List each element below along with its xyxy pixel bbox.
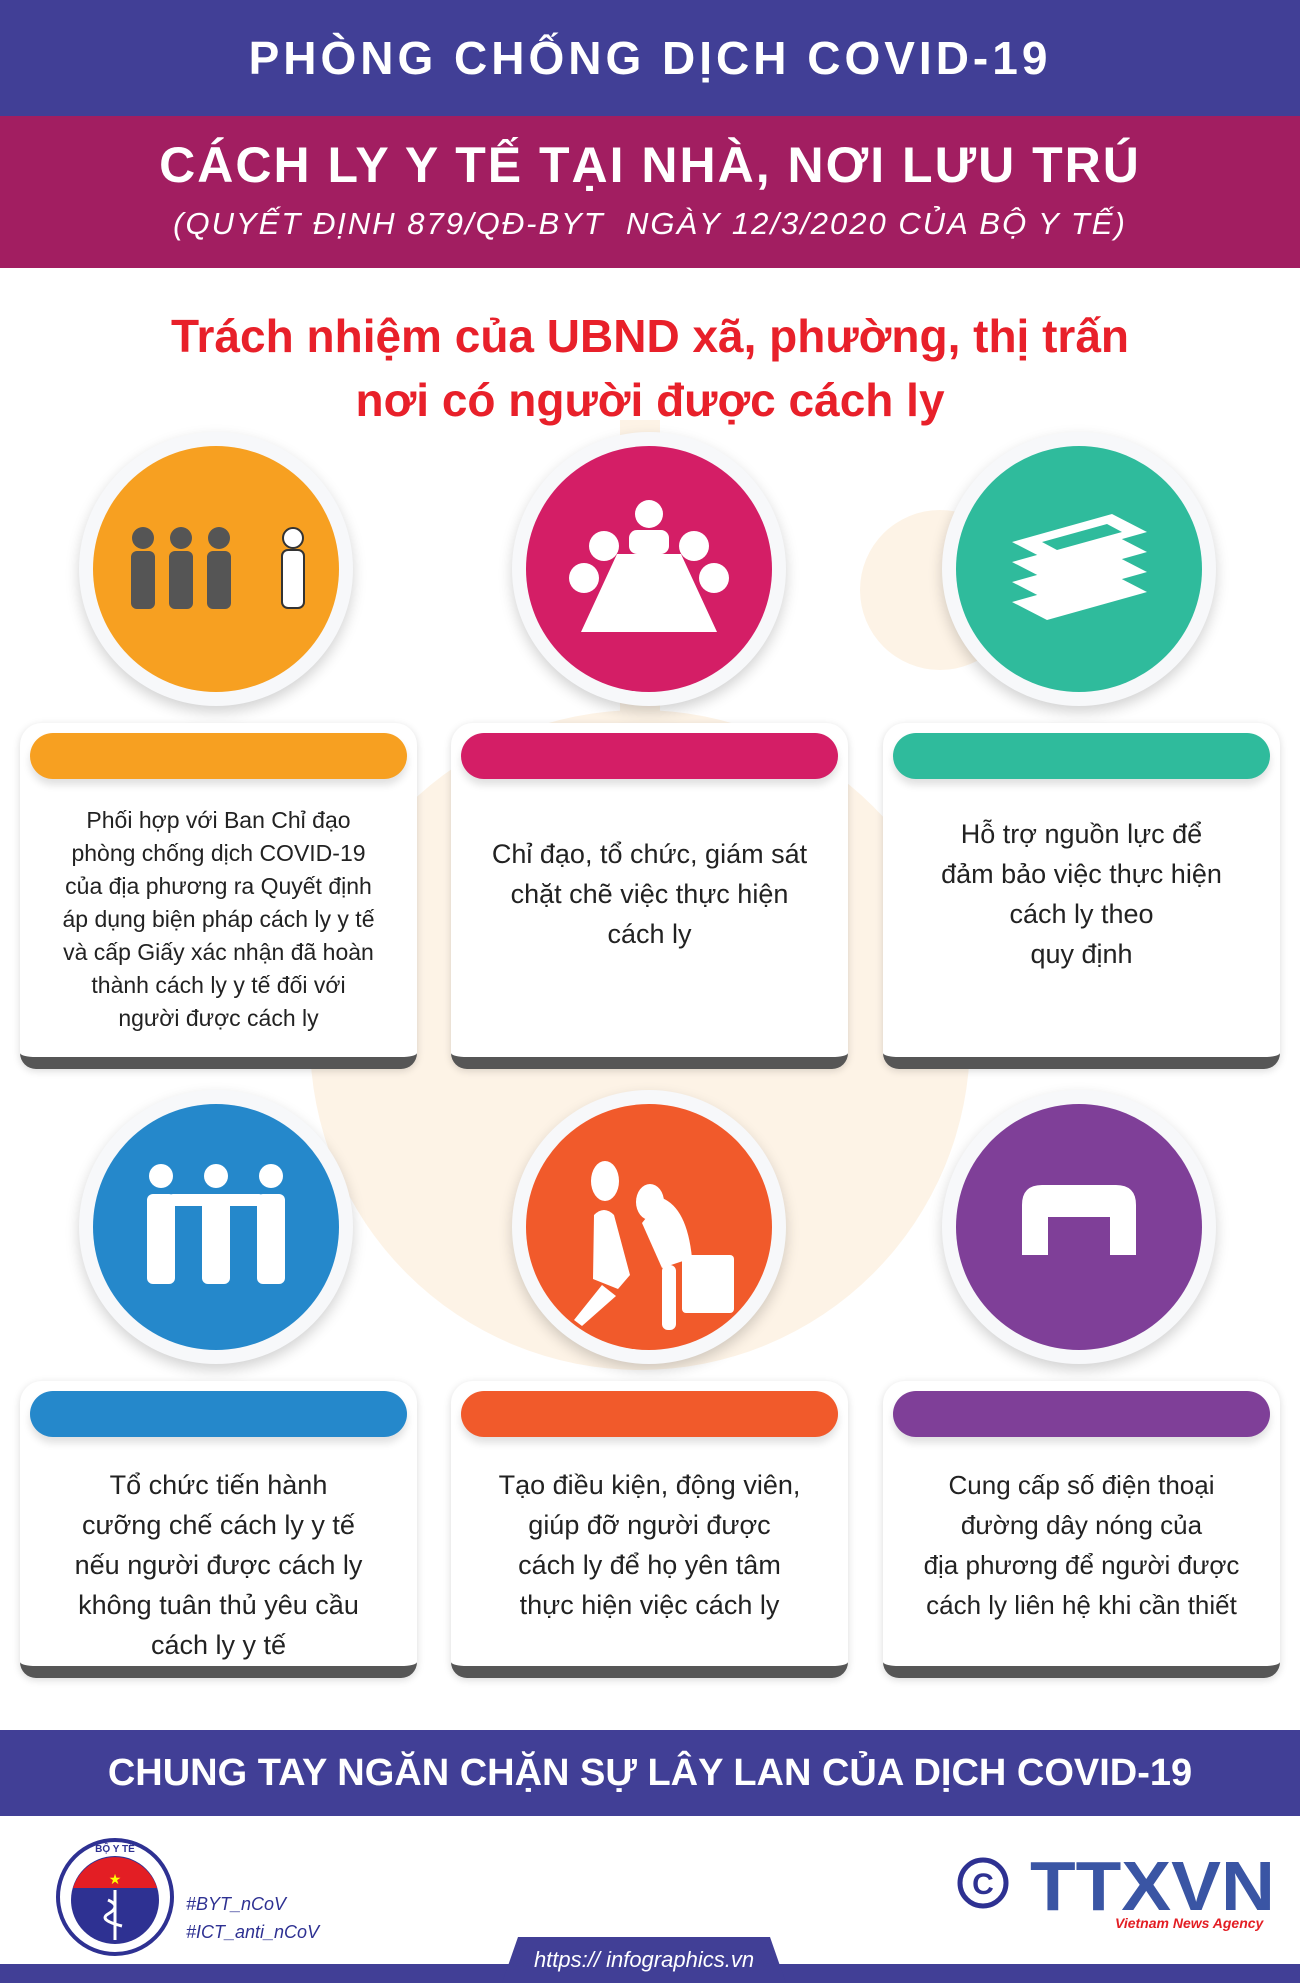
card 2 text: Chỉ đạo, tổ chức, giám sát [492, 839, 807, 869]
logo: TTXVN: C [972, 1868, 994, 1901]
footer url tab: https:// infographics.vn [534, 1947, 754, 1972]
card 1 text: thành cách ly y tế đối với [91, 972, 346, 998]
card 4 text: cưỡng chế cách ly y tế [82, 1510, 355, 1540]
header band: subtitle [0, 116, 1300, 268]
header band: top title [0, 0, 1300, 116]
bottom slogan band [0, 1730, 1300, 1816]
card 5 text: giúp đỡ người được [528, 1510, 771, 1540]
card 5 [451, 1381, 848, 1678]
red heading: nơi có người được cách ly [355, 374, 945, 426]
circle icon: three people (blue) [79, 1090, 353, 1364]
card 4 text: nếu người được cách ly [75, 1550, 362, 1580]
card 6 text: Cung cấp số điện thoại [949, 1470, 1214, 1500]
card 1 text: người được cách ly [118, 1004, 319, 1030]
card 4 [20, 1381, 417, 1678]
decision reference: (QUYẾT ĐỊNH 879/QĐ-BYT NGÀY 12/3/2020 CỦA BỘ Y TẾ) [173, 206, 1127, 241]
card 1 text: phòng chống dịch COVID-19 [71, 840, 366, 866]
card 2 text: cách ly [607, 919, 692, 949]
card 3 text: đảm bảo việc thực hiện [941, 859, 1222, 889]
card 1 text: và cấp Giấy xác nhận đã hoàn [63, 938, 374, 964]
card 4 text: Tổ chức tiến hành [110, 1470, 327, 1500]
card 1 text [62, 806, 374, 1031]
card 6 text [924, 1470, 1239, 1620]
circle icon: comforting (orange-red) [512, 1090, 786, 1364]
card 3 text [941, 819, 1222, 969]
background virus decoration [312, 420, 977, 1370]
card 6 text: cách ly liên hệ khi cần thiết [926, 1590, 1237, 1620]
red heading [171, 310, 1129, 426]
circle icon: money stack (teal) [942, 432, 1216, 706]
hashtags: #ICT_anti_nCoV [186, 1922, 319, 1942]
header band: top title: PHÒNG CHỐNG DỊCH COVID-19 [249, 32, 1051, 84]
card 5 text: Tạo điều kiện, động viên, [499, 1470, 800, 1500]
logo: TTXVN: Vietnam News Agency [1115, 1915, 1265, 1931]
card 1 text: áp dụng biện pháp cách ly y tế [62, 906, 374, 932]
logo: Ministry of Health: ★ [109, 1871, 121, 1887]
card 1 [20, 723, 417, 1069]
card 4 text [75, 1470, 362, 1660]
card 3 text: quy định [1030, 939, 1133, 969]
circle icon: meeting (magenta) [512, 432, 786, 706]
circle icon: phone (purple) [942, 1090, 1216, 1364]
circle icon: people group (orange) [79, 432, 353, 706]
card 4 text: cách ly y tế [151, 1630, 286, 1660]
card 1 text: Phối hợp với Ban Chỉ đạo [86, 806, 351, 832]
subtitle heading: CÁCH LY Y TẾ TẠI NHÀ, NƠI LƯU TRÚ [159, 137, 1141, 193]
logo: Ministry of Health: BỘ Y TẾ [95, 1842, 135, 1855]
card 4 text: không tuân thủ yêu cầu [78, 1590, 359, 1620]
footer url tab [0, 1937, 1300, 1983]
card 3 [883, 723, 1280, 1069]
card 2 text: chặt chẽ việc thực hiện [511, 879, 788, 909]
card 2 [451, 723, 848, 1069]
logo: Ministry of Health [56, 1838, 174, 1956]
logo: TTXVN [958, 1850, 1275, 1931]
bottom slogan band: CHUNG TAY NGĂN CHẶN SỰ LÂY LAN CỦA DỊCH COVID-19 [108, 1752, 1192, 1794]
card 6 text: địa phương để người được [924, 1550, 1239, 1580]
card 5 text [499, 1470, 800, 1620]
card 3 text: Hỗ trợ nguồn lực để [961, 819, 1202, 849]
red heading: Trách nhiệm của UBND xã, phường, thị trấn [171, 310, 1129, 362]
hashtags [186, 1894, 320, 1942]
card 2 text [492, 839, 807, 949]
hashtags: #BYT_nCoV [186, 1894, 286, 1914]
card 5 text: thực hiện việc cách ly [520, 1590, 779, 1620]
card 1 text: của địa phương ra Quyết định [65, 872, 372, 898]
card 6 text: đường dây nóng của [961, 1510, 1202, 1540]
card 3 text: cách ly theo [1009, 899, 1154, 929]
card 5 text: cách ly để họ yên tâm [518, 1550, 781, 1580]
card 6 [883, 1381, 1280, 1678]
